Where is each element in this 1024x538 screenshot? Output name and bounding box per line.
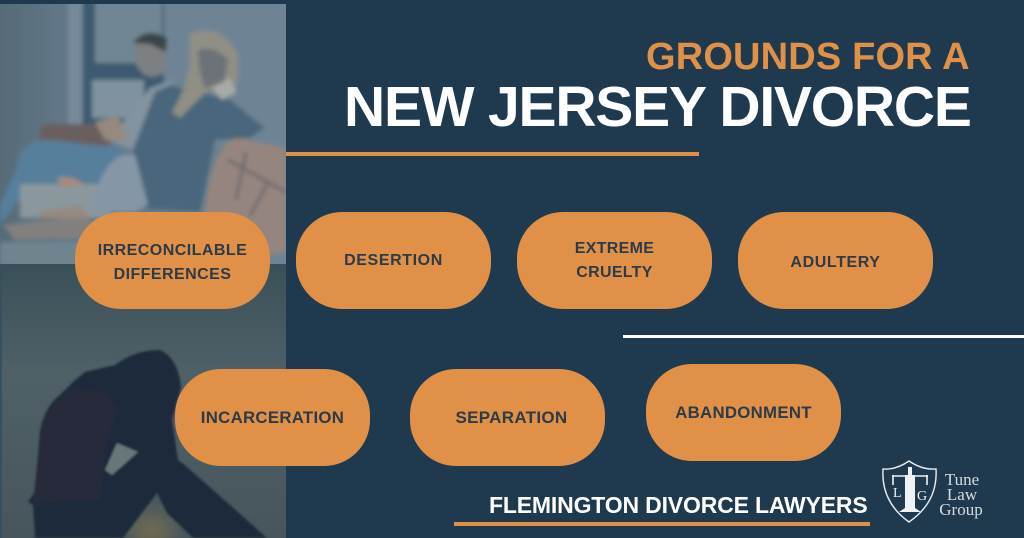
pill: extreme cruelty: EXTREME: [575, 240, 654, 256]
title: new jersey divorce: NEW JERSEY DIVORCE: [344, 75, 971, 139]
pill: irreconcilable differences: DIFFERENCES: [114, 266, 231, 282]
gap between arm and leg: [105, 443, 138, 475]
pill: adultery: [738, 212, 933, 309]
pill: adultery: ADULTERY: [790, 254, 881, 270]
pill: incarceration: [175, 369, 370, 466]
pill: abandonment: [646, 364, 841, 461]
icon: shield with scales monogram: [883, 461, 936, 522]
logo wordmark: Law: [947, 485, 978, 504]
logo wordmark: Tune: [945, 470, 979, 489]
pill: abandonment: ABANDONMENT: [675, 402, 812, 422]
icon: shield with scales monogram: L: [893, 486, 902, 501]
logo wordmark: Group: [939, 500, 983, 519]
pill: separation: SEPARATION: [456, 408, 567, 426]
pill: incarceration: INCARCERATION: [201, 408, 344, 426]
photo panel: couple on sofa and woman sitting alone: [0, 4, 286, 538]
photo: woman sitting alone: [0, 264, 286, 538]
orange divider under footer label: [454, 522, 870, 526]
pill: desertion: [296, 212, 491, 309]
title: grounds for a: GROUNDS FOR A: [646, 36, 970, 78]
orange divider under title: [286, 152, 699, 156]
torso, hair and arms silhouette: [28, 350, 267, 538]
footer label: flemington divorce lawyers: FLEMINGTON DIVORCE LAWYERS: [489, 492, 868, 518]
pill: desertion: DESERTION: [344, 252, 443, 268]
pill: separation: [410, 369, 605, 466]
white divider: [623, 335, 1024, 338]
photo: couple on sofa: [0, 0, 286, 266]
logo: tune law group: [882, 460, 983, 523]
icon: shield with scales monogram: G: [917, 489, 927, 504]
pill: extreme cruelty: [517, 212, 712, 309]
pill: irreconcilable differences: [75, 212, 270, 309]
pill: extreme cruelty: CRUELTY: [576, 264, 653, 280]
pill: irreconcilable differences: IRRECONCILABLE: [98, 242, 247, 258]
